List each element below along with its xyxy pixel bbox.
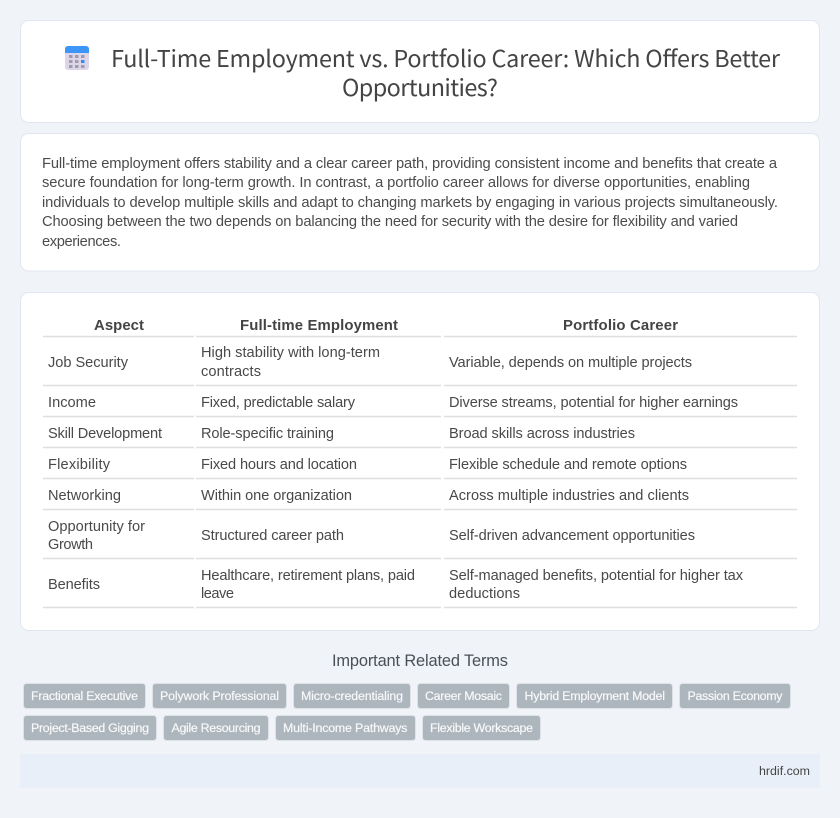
- tag: passion economy: Passion Economy: [688, 689, 783, 703]
- tag: flexible workscape: [422, 716, 540, 740]
- tag: career mosaic: [418, 684, 510, 708]
- tag: polywork professional: [152, 684, 286, 708]
- row: job security: Job Security: [48, 355, 129, 371]
- tag: hybrid employment model: [516, 684, 672, 708]
- text block: introduction paragraph: experiences.: [42, 234, 121, 250]
- row: flexibility: Flexibility: [48, 457, 111, 473]
- text block: introduction paragraph: individuals to develop multiple skills and adapt to changing markets by engaging in various projects simultaneously.: [42, 195, 778, 211]
- row: flexibility: Flexible schedule and remote options: [449, 457, 687, 473]
- row: opportunity for growth: Growth: [48, 537, 93, 553]
- panel: introduction: [20, 134, 820, 271]
- tag: multi-income pathways: [276, 716, 416, 740]
- row: opportunity for growth: [48, 519, 695, 553]
- tag: multi-income pathways: Multi-Income Pathways: [283, 721, 408, 735]
- row: benefits: [48, 568, 744, 602]
- tag: fractional executive: [24, 684, 146, 708]
- footer: hrdif.com: [759, 764, 810, 778]
- table header row: Portfolio Career: [563, 318, 678, 334]
- table header row: [94, 318, 678, 334]
- text block: introduction paragraph: [42, 156, 778, 250]
- tag: flexible workscape: Flexible Workscape: [430, 721, 533, 735]
- row: benefits: Healthcare, retirement plans, paid: [201, 568, 415, 584]
- table header row: Aspect: [94, 318, 144, 334]
- row: networking: Within one organization: [201, 488, 352, 504]
- row: job security: contracts: [201, 364, 261, 380]
- icon: calendar: [65, 46, 89, 70]
- row: benefits: leave: [201, 586, 234, 602]
- tag: project-based gigging: Project-Based Gigging: [31, 721, 149, 735]
- tag: fractional executive: Fractional Executive: [31, 689, 138, 703]
- row: opportunity for growth: Structured career path: [201, 528, 344, 544]
- row: networking: [48, 488, 689, 504]
- title: Opportunities?: [342, 69, 498, 103]
- tag: passion economy: [680, 684, 790, 708]
- row: skill development: Skill Development: [48, 426, 162, 442]
- row: skill development: Broad skills across industries: [449, 426, 635, 442]
- tag: agile resourcing: [164, 716, 268, 740]
- row: benefits: Benefits: [48, 577, 100, 593]
- text block: introduction paragraph: Choosing between the two depends on balancing the need for security with the desire for flexibility and varied: [42, 214, 738, 230]
- tags: related terms: [24, 684, 790, 740]
- tag: micro-credentialing: [294, 684, 410, 708]
- row: job security: Variable, depends on multiple projects: [449, 355, 692, 371]
- title: [111, 40, 781, 103]
- row: opportunity for growth: Opportunity for: [48, 519, 145, 535]
- row: job security: [48, 345, 692, 380]
- tag: polywork professional: Polywork Professional: [160, 689, 279, 703]
- tag: agile resourcing: Agile Resourcing: [172, 721, 261, 735]
- heading: important related terms: Important Related Terms: [332, 652, 508, 670]
- panel: header: [20, 20, 820, 122]
- row: networking: Across multiple industries and clients: [449, 488, 689, 504]
- row: income: Income: [48, 395, 96, 411]
- tag: project-based gigging: [24, 716, 156, 740]
- panel: comparison table: [20, 292, 820, 630]
- row: income: Diverse streams, potential for higher earnings: [449, 395, 738, 411]
- text block: introduction paragraph: secure foundation for long-term growth. In contrast, a portfolio career allows for diverse opportunities, enabling: [42, 175, 750, 191]
- row: benefits: deductions: [449, 586, 520, 602]
- row: skill development: Role-specific training: [201, 426, 334, 442]
- row: opportunity for growth: Self-driven advancement opportunities: [449, 528, 695, 544]
- table header row: Full-time Employment: [240, 318, 398, 334]
- text block: introduction paragraph: Full-time employment offers stability and a clear career path, providing consistent income and benefits that create a: [42, 156, 778, 172]
- row: benefits: Self-managed benefits, potential for higher tax: [449, 568, 744, 584]
- row: income: [48, 395, 738, 411]
- row: networking: Networking: [48, 488, 121, 504]
- tag: career mosaic: Career Mosaic: [425, 689, 502, 703]
- row: flexibility: Fixed hours and location: [201, 457, 357, 473]
- tag: hybrid employment model: Hybrid Employment Model: [524, 689, 665, 703]
- row: flexibility: [48, 457, 687, 473]
- title: Full-Time Employment vs. Portfolio Career: Which Offers Better: [111, 40, 781, 74]
- row: income: Fixed, predictable salary: [201, 395, 356, 411]
- row: job security: High stability with long-term: [201, 345, 380, 361]
- footer: [20, 754, 820, 788]
- row: skill development: [48, 426, 635, 442]
- tag: micro-credentialing: Micro-credentialing: [301, 689, 403, 703]
